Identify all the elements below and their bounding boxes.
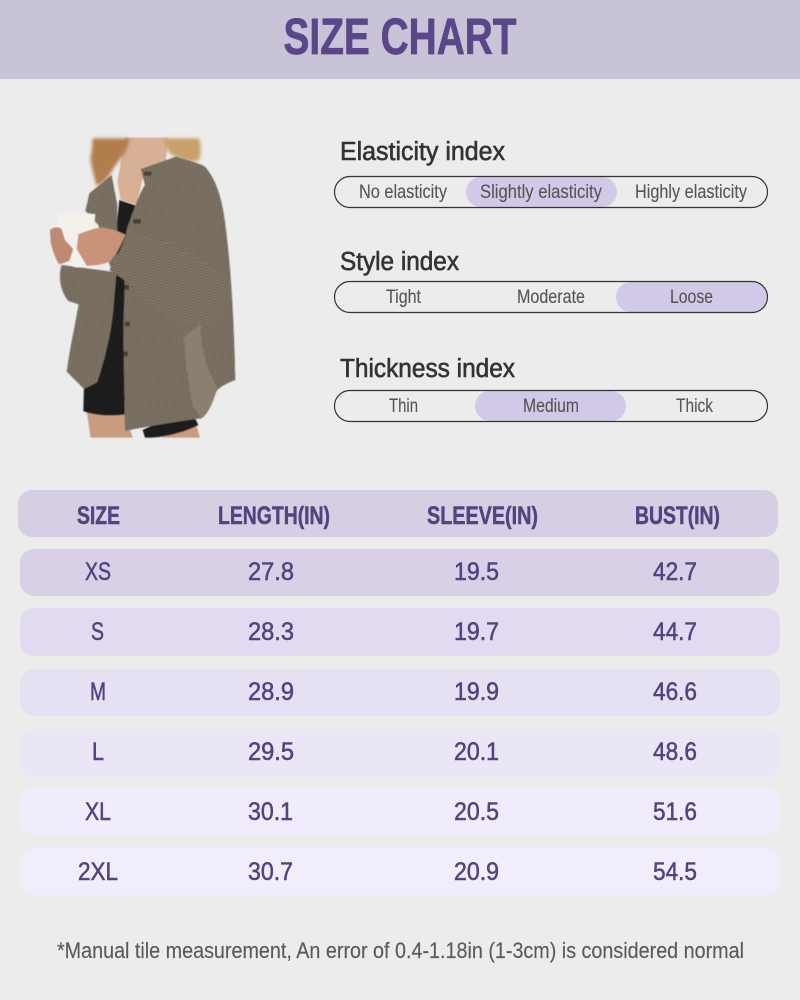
row XL: 20.5 <box>454 798 499 826</box>
jacket right panel <box>123 157 235 431</box>
row L <box>20 729 780 776</box>
table header row <box>18 490 778 537</box>
row M <box>20 669 780 716</box>
row XS: 19.5 <box>454 558 499 586</box>
row M: 46.6 <box>653 678 697 706</box>
row S: 44.7 <box>653 618 697 646</box>
scale: No elasticity <box>359 181 447 203</box>
title: SIZE CHART <box>284 8 516 65</box>
scale <box>334 282 768 312</box>
row S <box>20 608 780 656</box>
scale <box>334 390 768 422</box>
table header row: BUST(IN) <box>635 502 720 530</box>
footnote: *Manual tile measurement, An error of 0.4-1.18in (1-3cm) is considered normal <box>57 938 744 963</box>
heading: Style index <box>340 248 459 276</box>
row XS: XS <box>85 558 111 586</box>
row XL: 51.6 <box>653 798 697 826</box>
scale: Moderate <box>517 286 585 308</box>
thickness index <box>334 355 768 422</box>
jacket smooth side vent <box>184 325 217 418</box>
row 2XL <box>20 848 780 895</box>
right hand <box>77 228 126 266</box>
row XL: 30.1 <box>248 798 293 826</box>
jacket rolled sleeve <box>109 233 227 323</box>
row 2XL: 2XL <box>78 858 118 886</box>
row 2XL: 20.9 <box>454 858 499 886</box>
buttons <box>123 172 151 356</box>
product photo: woman in corduroy shirt jacket <box>50 138 235 438</box>
row L: L <box>92 738 104 766</box>
row XS: 27.8 <box>248 558 294 586</box>
black top and shorts <box>83 200 198 438</box>
scale <box>334 176 768 208</box>
scale: Medium <box>523 395 579 417</box>
row L: 20.1 <box>454 738 499 766</box>
row XS: 42.7 <box>653 558 697 586</box>
elasticity index <box>334 138 768 208</box>
style index <box>334 248 768 312</box>
table header row: SIZE <box>77 502 120 530</box>
scale: Loose <box>670 286 713 308</box>
row XL <box>20 787 780 835</box>
row S: 19.7 <box>454 618 499 646</box>
row 2XL: 30.7 <box>248 858 293 886</box>
heading: Thickness index <box>340 355 515 383</box>
scale: Slightly elasticity <box>480 181 602 203</box>
left hand <box>50 227 73 264</box>
jacket left panel and sleeve <box>60 175 117 389</box>
scale: Thick <box>676 395 713 417</box>
table header row: SLEEVE(IN) <box>427 502 538 530</box>
hair <box>91 138 201 185</box>
row M: 28.9 <box>248 678 294 706</box>
row L: 48.6 <box>653 738 697 766</box>
table header row: LENGTH(IN) <box>218 502 330 530</box>
legs <box>87 412 200 438</box>
size table <box>18 490 780 895</box>
row M: M <box>90 678 106 706</box>
scale: Tight <box>386 286 421 308</box>
coffee cup <box>57 213 95 267</box>
row L: 29.5 <box>248 738 294 766</box>
neck and chest <box>117 138 168 205</box>
heading: Elasticity index <box>340 138 505 166</box>
row M: 19.9 <box>454 678 499 706</box>
header banner <box>0 0 800 79</box>
row 2XL: 54.5 <box>653 858 697 886</box>
row XS <box>20 549 779 596</box>
row S: S <box>91 618 104 646</box>
row S: 28.3 <box>248 618 294 646</box>
scale: Thin <box>389 395 418 417</box>
scale: Highly elasticity <box>635 181 747 203</box>
row XL: XL <box>85 798 111 826</box>
